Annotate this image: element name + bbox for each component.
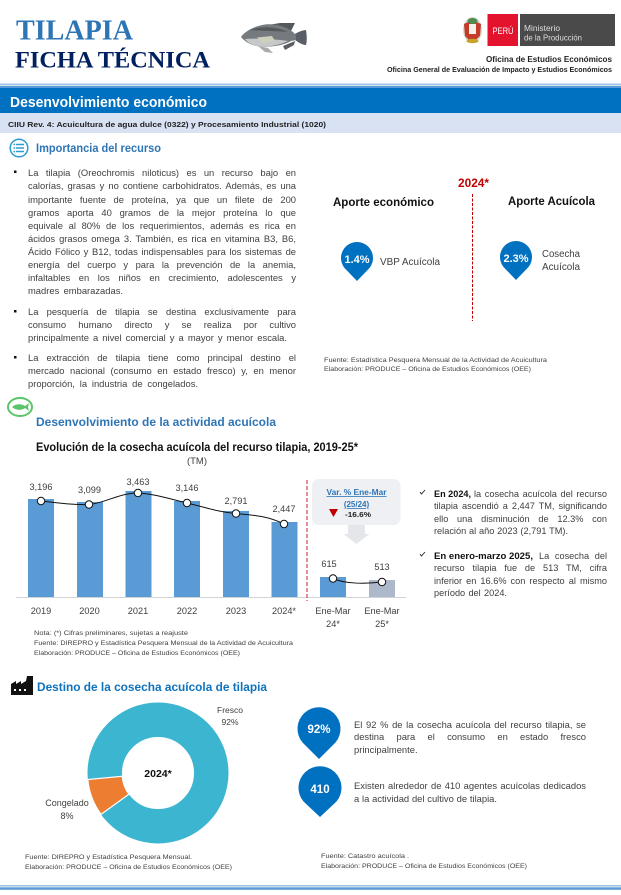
source: catastro: Elaboración: PRODUCE – Oficina de Estudios Económicos (OEE) — [321, 863, 527, 870]
source — [324, 357, 547, 373]
text block: análisis cosecha: recurso tilapia fue de 513 TM, cifra — [434, 563, 607, 573]
banner: Desenvolvimiento económico — [0, 88, 621, 113]
bar chart: cosecha anual: 2,791 — [224, 496, 248, 506]
text: 92%: destina para el consumo en estado fresco — [354, 731, 586, 742]
bar chart: cosecha anual: 513 — [374, 562, 390, 572]
title: Tilapia ficha técnica: FICHA TÉCNICA — [15, 48, 210, 72]
text block: importancia del recurso — [28, 167, 296, 389]
pin: 2.3% — [500, 241, 532, 280]
logo: Perú Ministerio de la Producción: Ministerio — [524, 24, 561, 33]
bar chart: cosecha anual: 24* — [326, 619, 340, 629]
text block: análisis cosecha: ello una disminución de 12.3% con — [434, 514, 607, 524]
chart notes: Fuente: DIREPRO y Estadística Pesquera Mensual de la Actividad de Acuicultura — [34, 640, 293, 647]
icon: list — [10, 139, 28, 157]
title: Tilapia ficha técnica: TILAPIA — [16, 16, 134, 46]
logo: Perú Ministerio de la Producción — [488, 14, 615, 46]
heading: aporte económico: Aporte económico — [333, 195, 434, 209]
chart notes: Elaboración: PRODUCE – Oficina de Estudios Económicos (OEE) — [34, 650, 240, 657]
pin: 2.3%: 2.3% — [503, 253, 529, 265]
label: cosecha acuícola — [542, 249, 580, 273]
heading: destino de la cosecha: Destino de la cosecha acuícola de tilapia — [37, 680, 267, 694]
banner: Desenvolvimiento económico: Desenvolvimiento económico — [10, 95, 207, 111]
donut chart: destino: 8% — [60, 811, 74, 821]
bar chart: cosecha anual: Ene-Mar — [315, 606, 351, 616]
panel: aporte — [324, 176, 595, 373]
text block: análisis cosecha: la cosecha acuícola del recurso — [474, 489, 607, 499]
text block: importancia del recurso: importante fuente de proteína, ya que un filete de 200 — [28, 194, 296, 205]
text block: análisis cosecha — [434, 489, 607, 598]
checks and lead-ins: análisis cosecha: En 2024, — [434, 489, 471, 499]
logo: coat of arms — [463, 17, 482, 43]
heading: Importancia del recurso: Importancia del recurso — [36, 141, 161, 155]
pin: 92%: 92% — [307, 724, 331, 736]
text: 410: a la actividad del cultivo de tilapia. — [354, 793, 497, 804]
pin: 410: 410 — [310, 784, 330, 796]
logo: Perú Ministerio de la Producción: PERÚ — [492, 26, 514, 36]
pin: 1.4% — [341, 242, 373, 281]
text block: importancia del recurso: energía del cuerpo y para la prevención de la anemia, — [28, 259, 296, 270]
bar chart: cosecha anual: 3,099 — [78, 485, 101, 495]
bar chart: cosecha anual: 615 — [321, 559, 337, 569]
donut chart: destino: 92% — [221, 717, 239, 727]
text block: importancia del recurso: ácidos grasos omega 3. También, es rica en vitamina B3, B6, — [28, 233, 296, 244]
logo: Perú Ministerio de la Producción: de la Producción — [524, 34, 582, 42]
text block: importancia del recurso: La tilapia (Oreochromis niloticus) es un recurso bajo en — [28, 167, 296, 178]
bar chart: cosecha anual: 2,447 — [272, 504, 296, 514]
banner: CIIU — [0, 113, 621, 133]
banner: CIIU: CIIU Rev. 4: Acuicultura de agua dulce (0322) y Procesamiento Industrial (1020) — [8, 120, 327, 129]
text block: importancia del recurso: mercado nacional (consumo en estado fresco) y, en menor — [28, 365, 296, 376]
chart title: Evolución de la cosecha acuícola del recurso tilapia, 2019-25* — [36, 442, 358, 454]
text: 92%: El 92 % de la cosecha acuícola del recurso tilapia, se — [354, 719, 586, 730]
pin: 92% — [298, 707, 340, 759]
bar chart: cosecha anual: Ene-Mar — [364, 606, 400, 616]
text block: importancia del recurso: gramos aporta 40 gramos de la mejor proteína lo que — [28, 207, 296, 218]
text block: importancia del recurso: madres embarazadas. — [28, 285, 123, 296]
bar chart: cosecha anual: 2024* — [272, 606, 296, 616]
text block: análisis cosecha: relación al año 2023 (2,791 TM). — [434, 526, 568, 536]
donut chart: destino: Congelado — [45, 798, 89, 808]
pin: 1.4%: 1.4% — [344, 254, 370, 266]
source: donut: Fuente: DIREPRO y Estadística Pesquera Mensual. — [25, 854, 192, 861]
bar chart: cosecha anual: 3,146 — [176, 483, 198, 493]
source: catastro — [321, 853, 527, 870]
text block: importancia del recurso: Ácido Fólico y B12, todas indispensables para los sistemas de — [28, 246, 296, 257]
source: donut: Elaboración: PRODUCE – Oficina de Estudios Económicos (OEE) — [25, 864, 232, 871]
donut chart: destino: 2024* — [144, 768, 173, 780]
text block: importancia del recurso: consumo humano directo y se realiza por cultivo — [28, 319, 296, 330]
callout: variación: Var. % Ene-Mar — [326, 488, 386, 497]
icon: green fish badge — [8, 398, 32, 416]
callout: variación: -16.6% — [345, 510, 371, 519]
label: cosecha acuícola: Acuícola — [542, 262, 580, 273]
bar chart: cosecha anual: 2019 — [31, 606, 51, 616]
bar chart: cosecha anual: 2020 — [79, 606, 100, 616]
icon: tilapia fish — [241, 23, 307, 53]
text block: análisis cosecha: período del 2024. — [434, 588, 507, 598]
text block: análisis cosecha: inferior en 16.6% con respecto al mismo — [434, 576, 607, 586]
heading: desenvolvimiento de la actividad: Desenvolvimiento de la actividad acuícola — [36, 415, 276, 429]
bar chart: cosecha anual: 2021 — [128, 606, 148, 616]
office names: Oficina de Estudios Económicos — [486, 55, 612, 64]
donut chart: destino — [45, 705, 243, 826]
source: donut — [25, 854, 232, 871]
text: 410 — [354, 780, 586, 804]
office names: Oficina General de Evaluación de Impacto y Estudios Económicos — [387, 67, 612, 74]
text: 92% — [354, 719, 586, 755]
bar chart: cosecha anual — [16, 477, 406, 629]
text block: análisis cosecha: La cosecha del — [539, 551, 607, 561]
chart title — [36, 442, 358, 467]
text block: importancia del recurso: calorías, grasas y no contiene carbohidratos. Además, es una — [28, 180, 296, 191]
chart title: (TM) — [187, 456, 207, 467]
callout: variación — [312, 479, 400, 544]
chart notes: Nota: (*) Cifras preliminares, sujetas a reajuste — [34, 630, 188, 637]
text block: importancia del recurso: La pesquería de tilapia se destina exclusivamente para — [28, 306, 296, 317]
year label: 2024* — [458, 176, 489, 190]
bar chart: cosecha anual: 3,463 — [126, 477, 150, 487]
bar chart: cosecha anual: 25* — [375, 619, 389, 629]
bar chart: cosecha anual: 3,196 — [30, 482, 52, 492]
text: 92%: principalmente. — [354, 744, 418, 755]
label: VBP acuícola: VBP Acuícola — [380, 257, 440, 268]
label: cosecha acuícola: Cosecha — [542, 249, 580, 260]
icon: factory — [11, 676, 33, 695]
title: Tilapia ficha técnica — [15, 16, 210, 72]
text block: importancia del recurso: La extracción de tilapia tiene como principal destino el — [28, 352, 296, 363]
checks and lead-ins: análisis cosecha: En enero-marzo 2025, — [434, 551, 533, 561]
checks and lead-ins: análisis cosecha — [420, 489, 533, 561]
text block: importancia del recurso: principalmente a nivel comercial y a mayor y menor escala. — [28, 332, 287, 343]
callout: variación: (25/24) — [344, 500, 370, 509]
bar chart: cosecha anual: 2023 — [226, 606, 246, 616]
text block: importancia del recurso: proporción, la industria de congelados. — [28, 378, 198, 389]
source: Elaboración: PRODUCE – Oficina de Estudios Económicos (OEE) — [324, 366, 531, 373]
bullets: importancia del recurso — [14, 170, 16, 358]
source: catastro: Fuente: Catastro acuícola . — [321, 853, 409, 860]
heading: aporte acuícola: Aporte Acuícola — [508, 194, 595, 208]
office names — [387, 55, 612, 74]
pin: 410 — [298, 766, 341, 817]
text: 410: Existen alrededor de 410 agentes acuícolas dedicados — [354, 780, 586, 791]
text block: importancia del recurso: infaltables en los niños en crecimiento, adolescentes y — [28, 272, 296, 283]
text block: importancia del recurso: equivale al 80% de los requerimientos, además es rica en — [28, 220, 296, 231]
donut chart: destino: Fresco — [217, 705, 243, 715]
source: Fuente: Estadística Pesquera Mensual de la Actividad de Acuicultura — [324, 357, 547, 364]
chart notes — [34, 630, 293, 657]
bar chart: cosecha anual: 2022 — [177, 606, 197, 616]
text block: análisis cosecha: tilapia ascendió a 2,447 TM, significando — [434, 501, 607, 511]
